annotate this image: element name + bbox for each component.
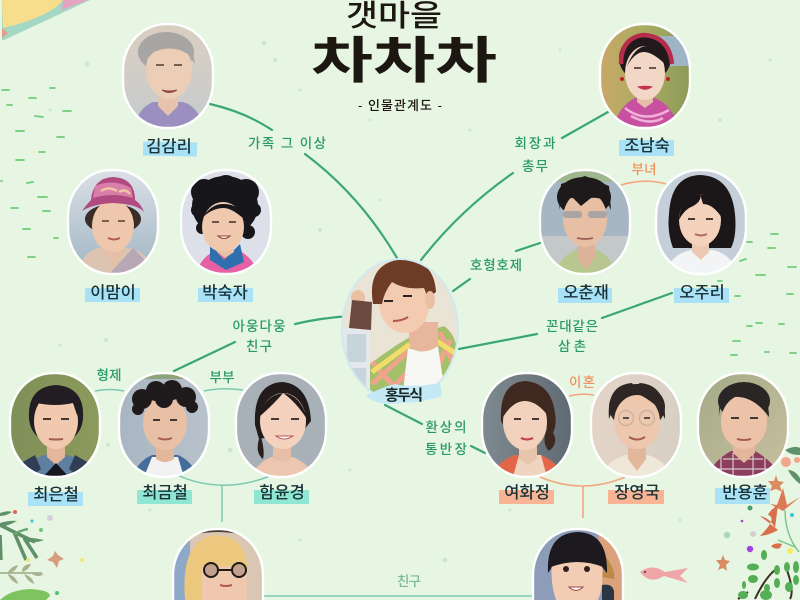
name label: 최금철: 최금철 (142, 483, 188, 502)
name label: 김감리: 김감리 (146, 137, 192, 156)
name label: 함윤경: 함윤경 (259, 483, 305, 502)
relationship labels: 통반장 (425, 442, 467, 457)
portrait: 최금철 (118, 373, 210, 477)
title (311, 0, 497, 113)
portrait: 이맘이 (67, 170, 159, 274)
portrait: bottom right child (533, 529, 623, 600)
relationship labels: 형제 (96, 368, 122, 383)
portrait: 최은철 (9, 373, 101, 477)
portrait: 박숙자 (180, 170, 272, 274)
decoration: pink fish (640, 568, 688, 583)
portrait: 오주리 (655, 170, 747, 274)
name label: 장영국: 장영국 (614, 483, 660, 502)
name label: 박숙자: 박숙자 (202, 283, 248, 302)
portrait: bottom left child (173, 529, 263, 600)
name label: 홍두식: 홍두식 (385, 387, 423, 404)
paper speckles (48, 40, 772, 562)
relationship labels: 부부 (210, 370, 234, 385)
subtitle: - 인물관계도 - (358, 98, 442, 113)
portrait: 조남숙 (599, 24, 692, 128)
name label: 이맘이: 이맘이 (90, 283, 136, 302)
name label: 여화정: 여화정 (504, 483, 550, 502)
decoration: right flowers and plants (716, 447, 800, 600)
relationship labels: 아웅다웅 (232, 319, 286, 334)
portrait: 여화정 (481, 373, 573, 477)
relationship labels: 회장과 (514, 136, 556, 151)
name label: 홍두식 (365, 383, 442, 404)
relationship labels: 친구 (246, 339, 272, 354)
relationship labels (96, 136, 656, 589)
title line 2: 차차차 (311, 21, 497, 93)
relationship labels: 부녀 (632, 162, 656, 177)
relationship labels: 호형호제 (470, 258, 522, 273)
relationship labels: 총무 (522, 159, 548, 174)
relationship labels: 꼰대같은 (546, 319, 598, 334)
relationship labels: 가족 그 이상 (248, 136, 326, 151)
decoration: green dashes left (1, 88, 71, 257)
decoration: fan top left (2, 0, 90, 40)
relationship labels: 이혼 (569, 375, 595, 390)
decoration: left plants (0, 510, 84, 600)
name label: 조남숙: 조남숙 (624, 136, 670, 155)
portrait: 홍두식 (342, 259, 458, 401)
name label: 반용훈: 반용훈 (722, 483, 768, 502)
portrait: 오춘재 (539, 170, 631, 274)
name label: 최은철: 최은철 (33, 485, 79, 504)
relationship lines (95, 104, 672, 596)
portrait: 김감리 (122, 24, 214, 128)
portrait: 반용훈 (697, 373, 789, 477)
decoration: green dashes right (718, 234, 796, 355)
relationship labels: 환상의 (426, 420, 466, 435)
name label: 장영국 (608, 483, 664, 504)
relationship labels: 친구 (397, 574, 421, 589)
name label: 오주리: 오주리 (679, 283, 725, 302)
portrait: 함윤경 (235, 373, 327, 477)
relationship labels: 삼촌 (558, 339, 586, 354)
name label: 오춘재: 오춘재 (563, 283, 609, 302)
portrait: 장영국 (590, 373, 682, 477)
